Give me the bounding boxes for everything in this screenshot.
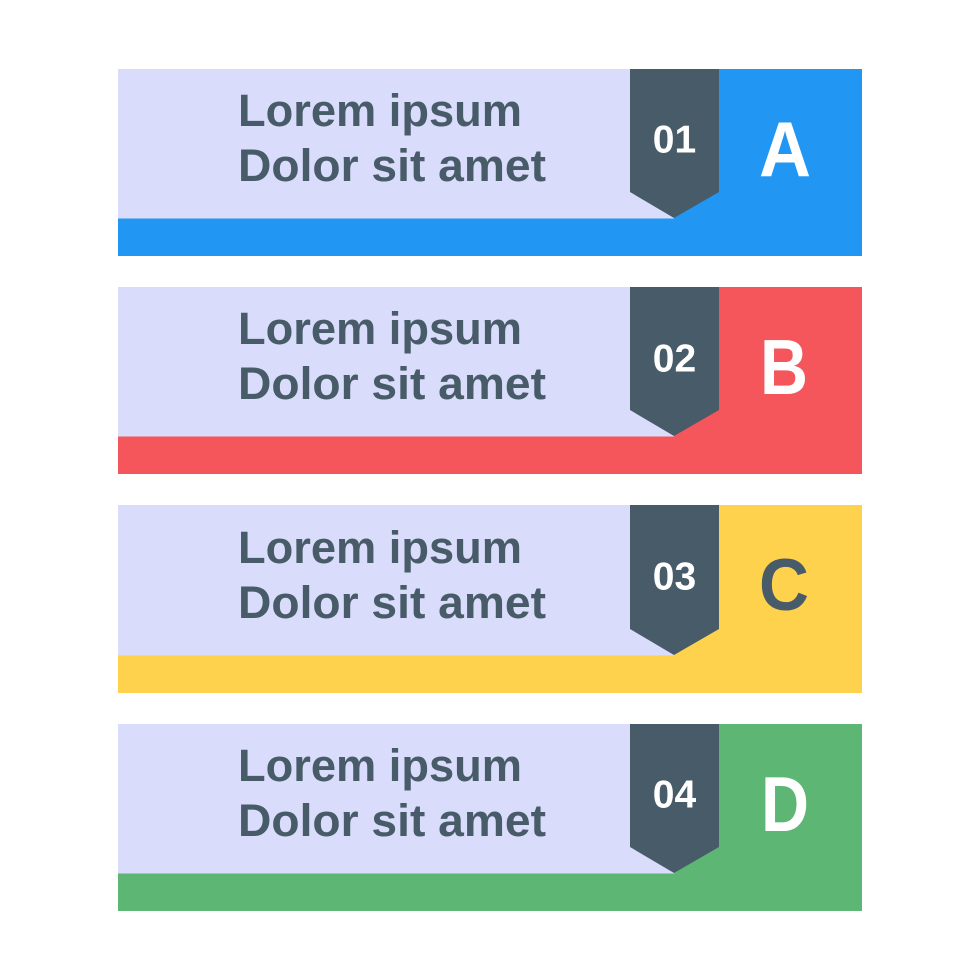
panel: row D xyxy=(118,724,862,911)
heading text C: Lorem ipsum xyxy=(238,522,522,573)
panel background D xyxy=(118,724,862,911)
letter C: C xyxy=(759,545,809,626)
colored band C xyxy=(118,505,862,693)
subheading text D: Dolor sit amet xyxy=(238,795,546,846)
number 03: 03 xyxy=(653,556,696,598)
letter B: B xyxy=(760,323,808,411)
panel: row C xyxy=(118,505,862,693)
ribbon C xyxy=(630,505,719,655)
colored band D xyxy=(118,724,862,911)
heading text B: Lorem ipsum xyxy=(238,303,522,354)
subheading text C: Dolor sit amet xyxy=(238,577,546,628)
number 04: 04 xyxy=(653,774,696,816)
subheading text A: Dolor sit amet xyxy=(238,140,546,191)
subheading text B: Dolor sit amet xyxy=(238,358,546,409)
ribbon D xyxy=(630,724,719,873)
letter A: A xyxy=(759,105,811,193)
heading text A: Lorem ipsum xyxy=(238,85,522,136)
colored band A xyxy=(118,69,862,256)
ribbon A xyxy=(630,69,719,218)
panel background A xyxy=(118,69,862,256)
letter D: D xyxy=(761,760,809,848)
heading text D: Lorem ipsum xyxy=(238,740,522,791)
number 02: 02 xyxy=(653,338,696,380)
panel: row B xyxy=(118,287,862,474)
panel background C xyxy=(118,505,862,693)
panel background B xyxy=(118,287,862,474)
panel: row A xyxy=(118,69,862,256)
colored band B xyxy=(118,287,862,474)
ribbon B xyxy=(630,287,719,436)
number 01: 01 xyxy=(653,118,696,162)
